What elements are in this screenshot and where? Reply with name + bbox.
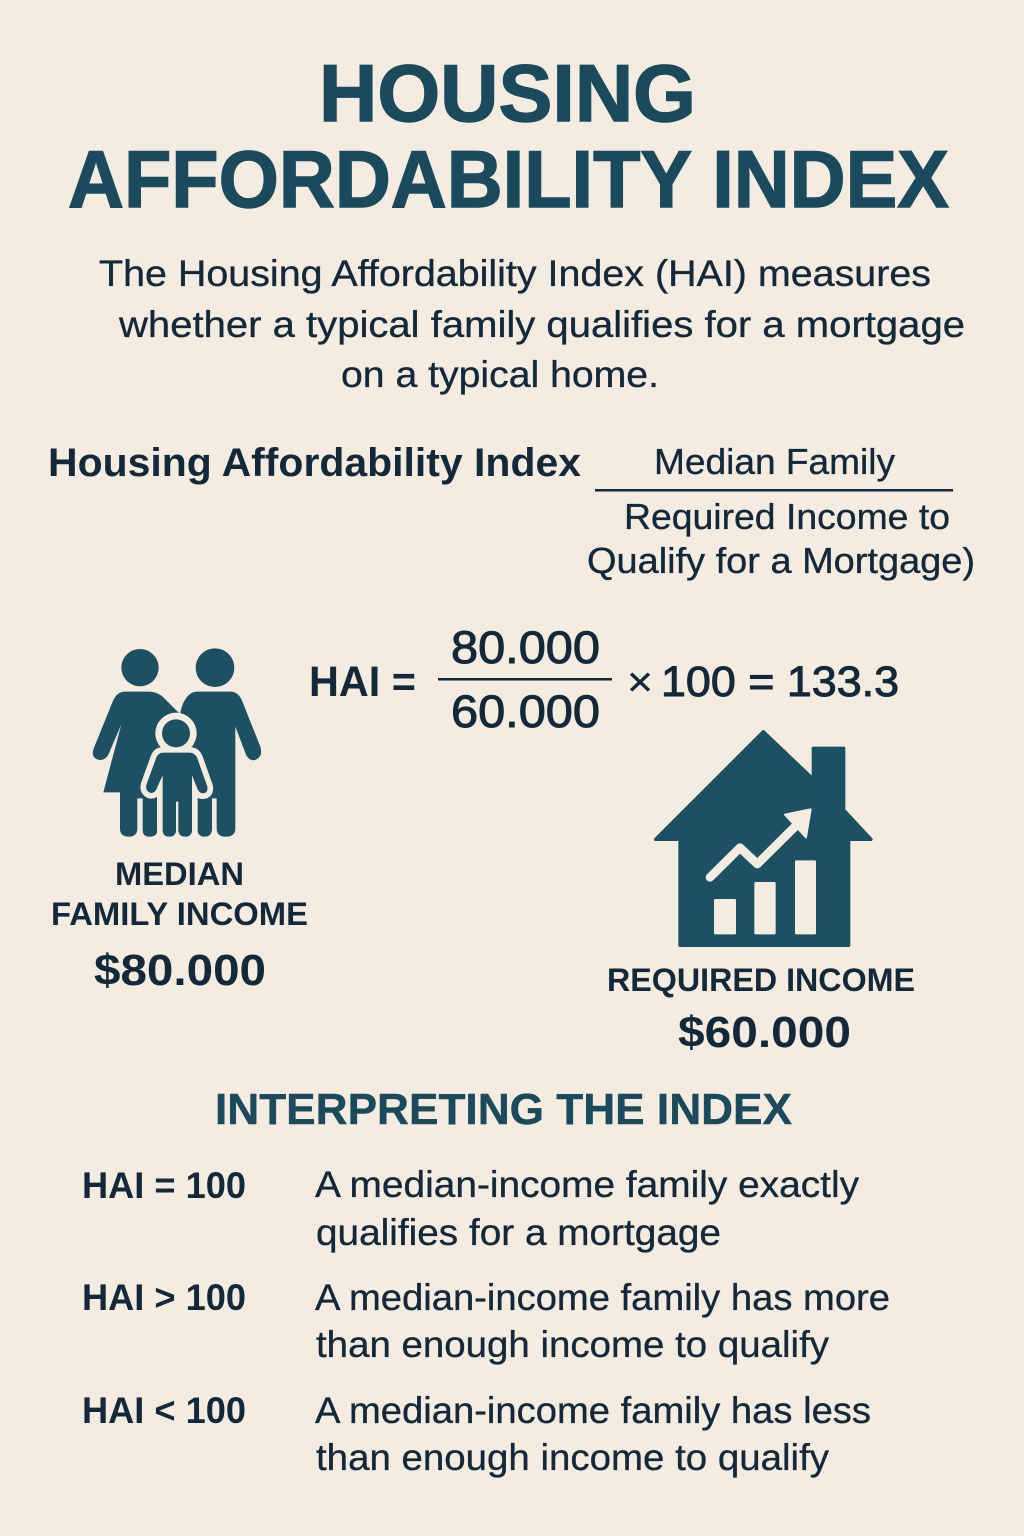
title: HOUSING: [319, 49, 696, 139]
row: HAI = 100: [82, 1164, 860, 1253]
title: [68, 49, 949, 225]
row: HAI < 100: than enough income to qualify: [316, 1437, 830, 1478]
intro text: whether a typical family qualifies for a mortgage: [118, 304, 965, 345]
HAI calculation: HAI =: [309, 658, 416, 706]
label: required income: $60.000: [678, 1008, 851, 1057]
label: median family income: [51, 856, 308, 995]
HAI calculation: 60.000: [451, 686, 600, 737]
growth arrow: [710, 809, 811, 877]
formula fraction: [587, 441, 975, 581]
row: HAI = 100: qualifies for a mortgage: [316, 1212, 721, 1253]
label: median family income: FAMILY INCOME: [51, 896, 308, 932]
icon: family: [93, 648, 261, 837]
heading: interpreting the index: INTERPRETING THE INDEX: [215, 1085, 792, 1134]
icon: house with growth chart: [656, 732, 871, 945]
HAI calculation: [309, 622, 899, 737]
HAI calculation: 100 = 133.3: [661, 658, 899, 706]
row: HAI > 100: than enough income to qualify: [316, 1324, 830, 1365]
formula fraction: Required Income to: [624, 496, 950, 537]
label: required income: REQUIRED INCOME: [607, 962, 915, 998]
row: HAI > 100: HAI > 100: [82, 1277, 246, 1318]
formula fraction: Median Family: [654, 441, 895, 482]
row: HAI < 100: [82, 1390, 871, 1478]
label: median family income: $80.000: [94, 946, 266, 995]
intro text: The Housing Affordability Index (HAI) measures: [99, 253, 931, 294]
row: HAI < 100: A median-income family has less: [315, 1390, 871, 1431]
label: median family income: MEDIAN: [115, 856, 244, 892]
title: AFFORDABILITY INDEX: [68, 135, 949, 225]
HAI calculation: ×: [627, 658, 653, 705]
row: HAI < 100: HAI < 100: [82, 1390, 246, 1431]
HAI calculation: 80.000: [451, 622, 600, 673]
intro text: [99, 253, 965, 395]
row: HAI = 100: HAI = 100: [82, 1165, 246, 1206]
label: required income: [607, 962, 915, 1057]
intro text: on a typical home.: [341, 354, 659, 395]
row: HAI = 100: A median-income family exactly: [315, 1164, 860, 1205]
formula heading: Housing Affordability Index: [48, 441, 581, 485]
child figure: [146, 713, 207, 837]
bar chart: [714, 860, 816, 934]
row: HAI > 100: [82, 1277, 890, 1365]
formula fraction: Qualify for a Mortgage): [587, 540, 975, 581]
row: HAI > 100: A median-income family has more: [315, 1277, 890, 1318]
